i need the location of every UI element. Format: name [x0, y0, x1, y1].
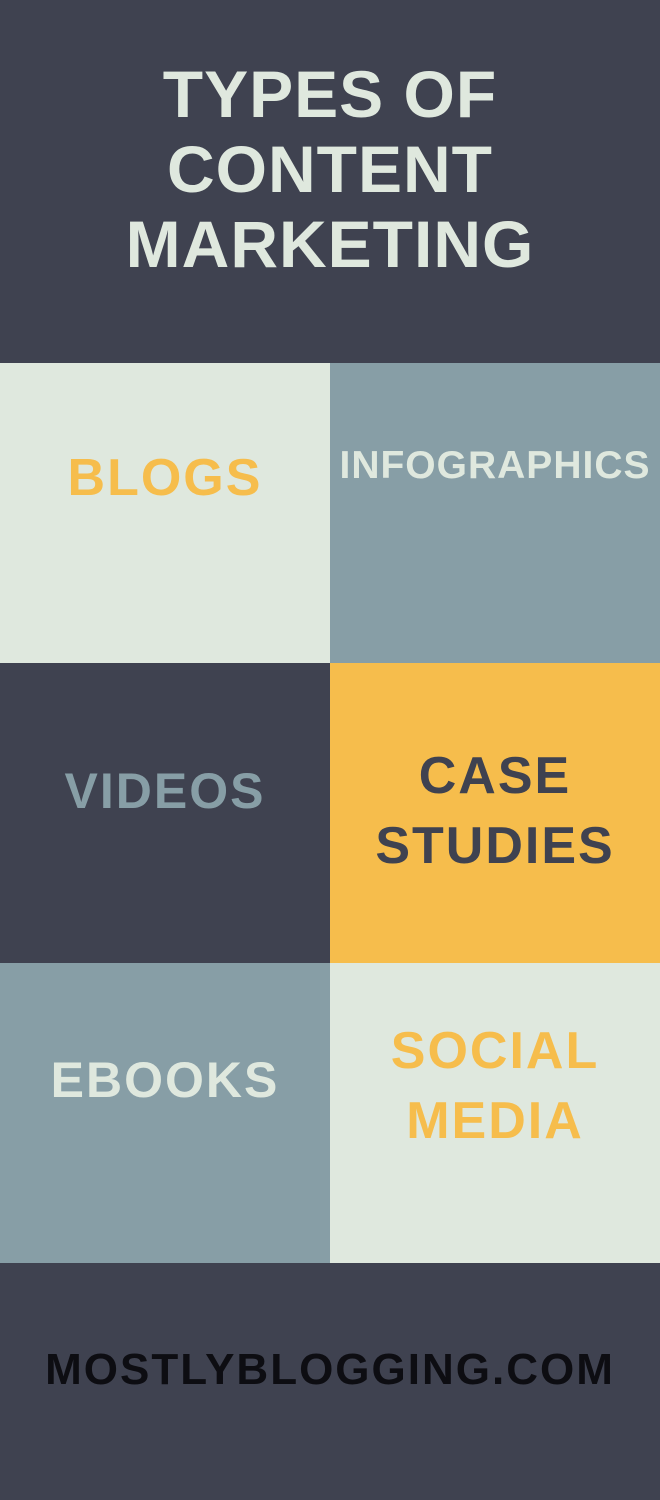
panel: blogs — [0, 363, 330, 663]
label: case studies — [375, 747, 615, 875]
title: MARKETING — [126, 207, 534, 281]
label: social media: MEDIA — [406, 1092, 584, 1150]
label: case studies: STUDIES — [375, 817, 615, 875]
label: infographics: INFOGRAPHICS — [339, 444, 650, 487]
panel: ebooks — [0, 963, 330, 1263]
panel: infographics — [330, 363, 660, 663]
label: blogs: BLOGS — [68, 449, 262, 507]
panel: videos — [0, 663, 330, 963]
footer text: MOSTLYBLOGGING.COM — [45, 1345, 615, 1394]
footer panel — [0, 1263, 660, 1500]
label: videos: VIDEOS — [65, 763, 265, 819]
label: social media: SOCIAL — [391, 1022, 599, 1080]
label: case studies: CASE — [419, 747, 571, 805]
label: ebooks: EBOOKS — [51, 1052, 279, 1108]
label: social media — [391, 1022, 599, 1150]
title: TYPES OF — [163, 57, 497, 131]
panel: case studies — [330, 663, 660, 963]
title: CONTENT — [167, 132, 493, 206]
panel: social media — [330, 963, 660, 1263]
header panel — [0, 0, 660, 363]
title — [126, 57, 534, 281]
